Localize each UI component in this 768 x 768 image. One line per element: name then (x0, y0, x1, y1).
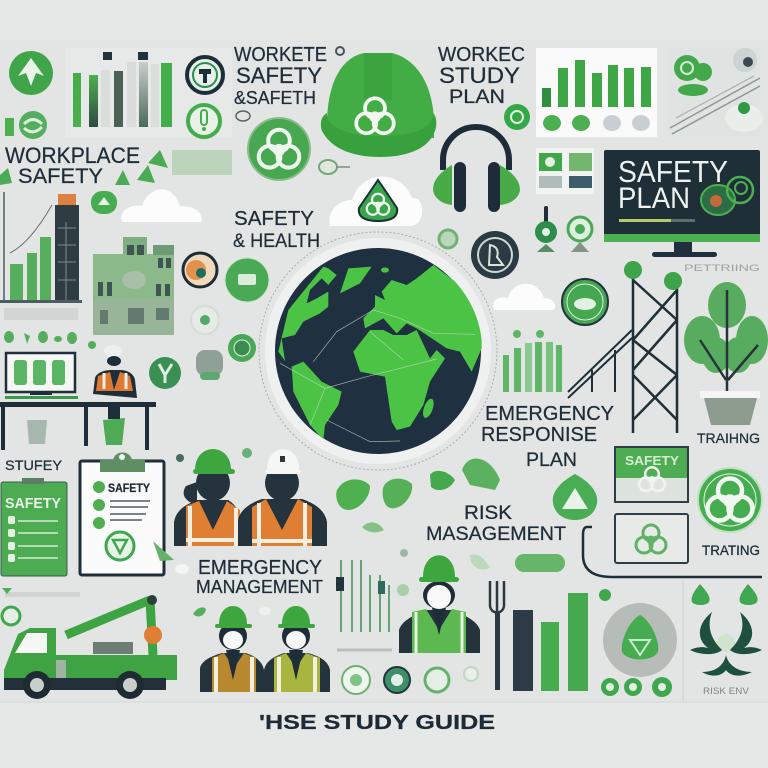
icon: cloud right (493, 284, 555, 310)
icon: small green swirl badge (5, 111, 47, 139)
panel: biohazard symbol with drops: RISK ENV (703, 686, 749, 696)
heading: workplace safety: WORKPLACE (5, 143, 140, 168)
icon: green circle badge (225, 258, 269, 302)
small leaf row (4, 331, 96, 349)
panel: workstation with worker (0, 345, 156, 450)
illustration: steel tower with stairs (568, 261, 682, 433)
panel: safety plan monitor (604, 150, 760, 257)
heading: safety and health: & HEALTH (233, 231, 320, 252)
icon: grey circle with green symbol (603, 603, 677, 677)
icon row: small green badges (599, 589, 672, 697)
illustration: tree in pot (684, 282, 768, 425)
heading: study plan: PLAN (449, 87, 505, 108)
icon: green badge beside worker (149, 357, 181, 389)
icon: small green check badge (504, 104, 530, 130)
bottom ring icons (342, 666, 478, 694)
icon cluster: top right sketches (668, 48, 763, 136)
icon: cloud with biohazard (329, 176, 422, 226)
panel: white bar chart (536, 48, 657, 137)
panel: white safety checklist clipboard (80, 452, 174, 575)
heading: study plan: WORKEC (438, 44, 525, 66)
icon: green car badge (562, 279, 608, 325)
connector line (583, 527, 762, 577)
heading: emergency response plan: PLAN (526, 450, 577, 471)
panel: biohazard symbol with drops (683, 580, 762, 702)
icon: green hard hat (321, 53, 436, 157)
illustration: green building (93, 237, 174, 335)
leaf icons right of workers (336, 459, 500, 532)
heading: emergency management (196, 557, 323, 597)
panel: safety sign (615, 447, 688, 502)
decorative green leaves (0, 150, 232, 185)
small ring icons (191, 306, 256, 362)
heading: emergency response plan: RESPONISE (481, 424, 597, 446)
chart: three tall bars (513, 593, 588, 691)
panel: green safety clipboard: SAFETY (5, 495, 61, 512)
continent: greenland (340, 267, 372, 293)
heading: worker safety: SAFETY (236, 63, 322, 88)
heading: worker safety: WORKETE (234, 44, 327, 66)
icon: green exclamation badge (188, 105, 220, 137)
heading: emergency response plan (481, 403, 614, 471)
panel: bar chart top left (65, 48, 232, 137)
icon: small green ring left (2, 607, 20, 625)
heading: study plan (438, 44, 525, 108)
icon: headphones (433, 127, 520, 212)
panel: small icon grid (536, 148, 594, 194)
continent: north america (278, 267, 337, 361)
icon: green warning drop (553, 474, 597, 520)
heading: workplace safety (5, 143, 140, 188)
heading: safety and health: SAFETY (234, 208, 314, 230)
illustration: two workers with green hard hats (200, 606, 330, 692)
panel: safety plan monitor: SAFETY (618, 154, 728, 189)
heading: safety and health (233, 208, 320, 252)
icon: fork (490, 581, 504, 690)
continent: eurasia (363, 265, 482, 372)
panel: biohazard screen (615, 514, 688, 563)
icon: grey helmet lamp (196, 350, 223, 380)
label: training bottom: TRATING (702, 542, 760, 558)
heading: worker safety: &SAFETH (234, 88, 316, 108)
heading: study plan: STUDY (439, 63, 520, 88)
panel: safety sign: SAFETY (625, 453, 679, 468)
label: training top: TRAIHNG (697, 430, 760, 446)
icon: green arrow badge (9, 51, 53, 95)
island: madagascar (423, 398, 434, 418)
chart: vertical gauges (336, 560, 392, 650)
panel: white safety checklist clipboard: SAFETY (108, 481, 150, 495)
icon: dark circle badge (471, 231, 519, 279)
label: stuffy: STUFEY (5, 457, 63, 473)
green smudges under risk management (470, 554, 565, 572)
icon: dark key badge (187, 57, 223, 93)
heading: risk management (426, 503, 566, 545)
heading: emergency management: EMERGENCY (198, 557, 322, 579)
heading: emergency response plan: EMERGENCY (485, 403, 614, 425)
globe (259, 232, 497, 470)
chart: bars with tower (0, 192, 82, 320)
icon: safety pins (535, 206, 592, 252)
icon: biohazard badge (248, 118, 310, 180)
heading: workplace safety: SAFETY (18, 165, 103, 188)
icon: large biohazard badge (698, 468, 762, 532)
heading: emergency management: MANAGEMENT (196, 577, 323, 597)
icon: small ring (439, 230, 457, 248)
icon: flame badge (183, 253, 217, 287)
continent: south america (292, 362, 342, 440)
continent: africa (353, 330, 445, 430)
panel: safety plan monitor: PLAN (618, 182, 690, 215)
illustration: truck with crane (4, 595, 177, 699)
title: 'HSE STUDY GUIDE (259, 712, 495, 734)
panel: green safety clipboard (1, 478, 67, 576)
heading: risk management: RISK (464, 503, 512, 524)
illustration: worker with green vest (399, 555, 480, 653)
island group (381, 267, 389, 273)
icon: cloud left (121, 189, 202, 222)
illustration: two workers in orange vests (174, 449, 327, 546)
scattered small icons (2, 47, 409, 617)
heading: risk management: MASAGEMENT (426, 524, 566, 545)
chart: small green bars (503, 330, 562, 392)
heading: worker safety (234, 44, 327, 108)
icon: small green rounded badge (91, 191, 117, 214)
label: small pet text: PETTRIING (684, 263, 760, 273)
